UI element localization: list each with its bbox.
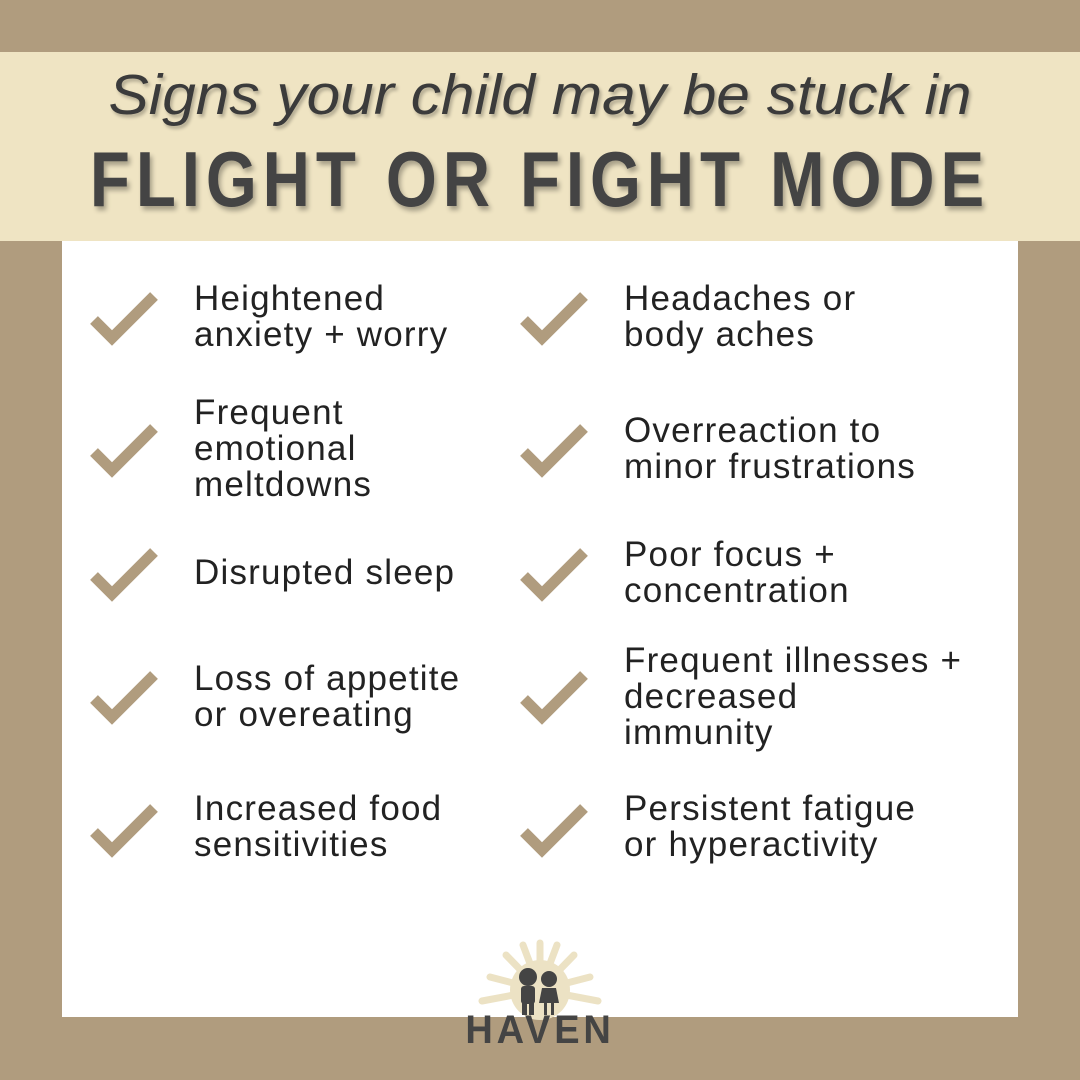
item 1: anxiety + worry xyxy=(194,315,448,354)
item 2: emotional xyxy=(194,429,357,468)
logo: HAVEN xyxy=(465,940,615,1050)
item 6 xyxy=(624,279,856,354)
item 2: meltdowns xyxy=(194,465,372,504)
item 10: Persistent fatigue xyxy=(624,789,916,828)
check 2 xyxy=(90,424,158,478)
item 9: immunity xyxy=(624,713,774,752)
item 5 xyxy=(194,789,442,864)
item 10: or hyperactivity xyxy=(624,825,879,864)
panel: signs list xyxy=(62,241,1018,1017)
item 7: minor frustrations xyxy=(624,447,916,486)
item 8: concentration xyxy=(624,571,850,610)
item 7: Overreaction to xyxy=(624,411,881,450)
main title: FLIGHT OR FIGHT MODE xyxy=(90,135,990,223)
icon: children xyxy=(519,968,559,1015)
item 1 xyxy=(194,279,448,354)
item 1: Heightened xyxy=(194,279,385,318)
item 7 xyxy=(624,411,916,486)
item 4 xyxy=(194,659,460,734)
item 4: or overeating xyxy=(194,695,414,734)
item 5: Increased food xyxy=(194,789,442,828)
check 8 xyxy=(520,548,588,602)
item 10 xyxy=(624,789,916,864)
item 4: Loss of appetite xyxy=(194,659,460,698)
check 9 xyxy=(520,671,588,725)
item 6: body aches xyxy=(624,315,815,354)
item 2: Frequent xyxy=(194,393,344,432)
item 6: Headaches or xyxy=(624,279,856,318)
icon: sun xyxy=(482,943,598,1020)
header band xyxy=(0,52,1080,241)
subtitle: Signs your child may be stuck in xyxy=(108,63,972,127)
item 9 xyxy=(624,641,962,752)
check 1 xyxy=(90,292,158,346)
check 5 xyxy=(90,804,158,858)
check 6 xyxy=(520,292,588,346)
check 10 xyxy=(520,804,588,858)
item 5: sensitivities xyxy=(194,825,389,864)
item 9: decreased xyxy=(624,677,798,716)
check 3 xyxy=(90,548,158,602)
item 2 xyxy=(194,393,372,504)
item 9: Frequent illnesses + xyxy=(624,641,962,680)
check 7 xyxy=(520,424,588,478)
item 8: Poor focus + xyxy=(624,535,836,574)
check 4 xyxy=(90,671,158,725)
item 3: Disrupted sleep xyxy=(194,553,455,592)
item 8 xyxy=(624,535,850,610)
